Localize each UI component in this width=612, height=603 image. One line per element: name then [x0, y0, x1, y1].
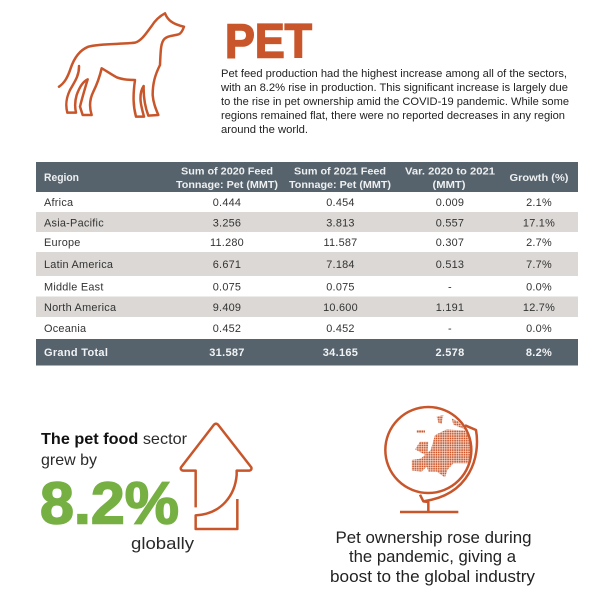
intro text block — [220, 68, 569, 136]
row: Europe — [44, 237, 552, 249]
row: Asia-Pacific: Asia-Pacific — [44, 218, 104, 230]
row: Grand Total: Grand Total — [44, 347, 108, 359]
table header: Tonnage: Pet (MMT) — [176, 179, 278, 191]
caption: boost to the global industry — [330, 567, 536, 586]
row: Oceania: 0.452 — [326, 323, 355, 335]
row: Asia-Pacific: 3.813 — [326, 218, 355, 230]
table header: (MMT) — [432, 179, 466, 191]
table header: Region — [44, 172, 79, 184]
table header: Var. 2020 to 2021 — [405, 166, 495, 178]
intro text block: around the world. — [221, 124, 308, 136]
row: Grand Total: 34.165 — [323, 347, 358, 359]
row: North America — [36, 296, 578, 317]
row: Africa: 0.009 — [436, 197, 464, 209]
row: Latin America: 7.184 — [326, 259, 355, 271]
row: Middle East: Middle East — [44, 282, 104, 294]
table header: Growth (%) — [510, 172, 568, 184]
row: Asia-Pacific: 3.256 — [213, 218, 241, 230]
callout footer: globally — [131, 534, 195, 553]
table header: Sum of 2020 Feed — [181, 166, 273, 178]
row: Africa: 2.1% — [526, 197, 552, 209]
row: North America: 12.7% — [523, 302, 555, 314]
table header: Tonnage: Pet (MMT) — [289, 179, 391, 191]
table header — [36, 162, 578, 192]
row: Grand Total: 2.578 — [435, 347, 465, 359]
row: Grand Total: 8.2% — [526, 347, 552, 359]
row: North America: 10.600 — [323, 302, 358, 314]
row: Latin America — [36, 252, 578, 276]
data table — [36, 162, 578, 366]
row: Africa: 0.444 — [213, 197, 241, 209]
row: Asia-Pacific — [36, 212, 578, 232]
row: Middle East: 0.075 — [213, 282, 241, 294]
row: North America: 1.191 — [436, 302, 464, 314]
title: PET — [225, 15, 312, 68]
big number: 8.2% — [40, 470, 179, 536]
icon: globe with dotted map — [385, 407, 477, 512]
row: Oceania: - — [448, 323, 452, 335]
row: Europe: Europe — [44, 237, 81, 249]
row: Europe: 2.7% — [526, 237, 552, 249]
row: Europe: 11.587 — [323, 237, 358, 249]
row: Latin America: Latin America — [44, 259, 114, 271]
row: Africa — [44, 197, 552, 209]
caption: Pet ownership rose during — [336, 528, 532, 547]
row: Asia-Pacific: 17.1% — [523, 218, 555, 230]
row: Latin America: 6.671 — [213, 259, 241, 271]
row: Grand Total: 31.587 — [209, 347, 245, 359]
row: Asia-Pacific: 0.557 — [436, 218, 464, 230]
caption: the pandemic, giving a — [349, 547, 517, 566]
row: Latin America: 7.7% — [526, 259, 552, 271]
row: Europe: 11.280 — [210, 237, 244, 249]
callout heading: The pet food sector — [41, 431, 188, 448]
callout subheading: grew by — [41, 452, 97, 469]
intro text block: Pet feed production had the highest increase among all of the sectors, — [221, 68, 567, 80]
row: Latin America: 0.513 — [436, 259, 464, 271]
caption — [330, 528, 536, 586]
row: Grand Total — [36, 339, 578, 366]
row: Middle East: 0.0% — [526, 282, 552, 294]
row: Africa: Africa — [44, 197, 74, 209]
row: Oceania: Oceania — [44, 323, 87, 335]
row: Africa: 0.454 — [326, 197, 355, 209]
row: Europe: 0.307 — [436, 237, 464, 249]
intro text block: regions remained flat, there were no reported decreases in any region — [221, 110, 565, 122]
row: North America: 9.409 — [213, 302, 241, 314]
row: Middle East: 0.075 — [326, 282, 355, 294]
row: Middle East: - — [448, 282, 452, 294]
row: North America: North America — [44, 302, 117, 314]
icon: dog outline — [59, 13, 184, 117]
callout: sector growth — [40, 424, 251, 553]
intro text block: to the rise in pet ownership amid the COVID-19 pandemic. While some — [221, 96, 569, 108]
row: Middle East — [44, 282, 552, 294]
row: Oceania: 0.452 — [213, 323, 241, 335]
row: Oceania: 0.0% — [526, 323, 552, 335]
icon: up arrow — [181, 424, 251, 529]
intro text block: with an 8.2% rise in production. This significant increase is largely due — [220, 82, 568, 94]
row: Oceania — [44, 323, 552, 335]
table header: Sum of 2021 Feed — [294, 166, 386, 178]
callout: pet ownership — [330, 407, 536, 586]
